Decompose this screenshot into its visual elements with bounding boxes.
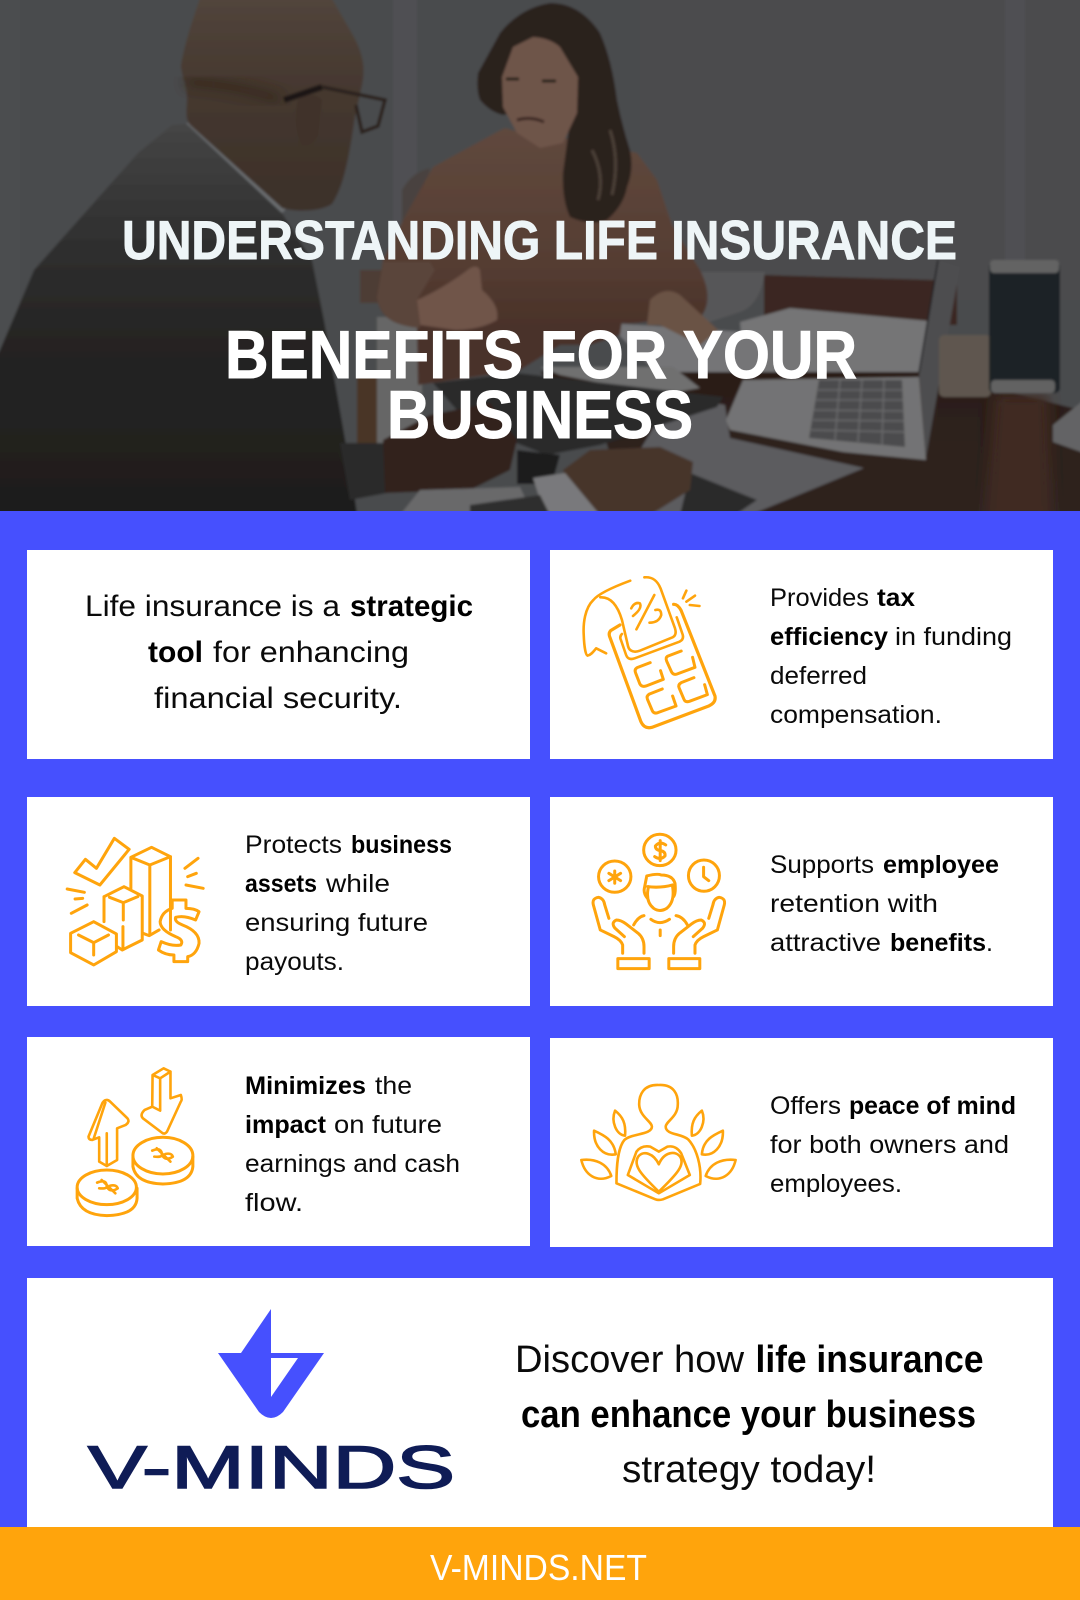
woman sweater xyxy=(377,128,708,327)
footer background xyxy=(0,1527,1080,1600)
dark notepad xyxy=(433,373,723,455)
title line: Understanding Life Insurance: UNDERSTANDING LIFE INSURANCE xyxy=(122,209,957,271)
text: employee retention: . xyxy=(986,929,993,957)
text: employee retention: retention with xyxy=(770,890,938,918)
title block xyxy=(122,209,957,453)
text: business assets xyxy=(245,831,452,976)
text: employee retention xyxy=(770,851,999,957)
text: minimizes impact: earnings and cash xyxy=(245,1150,460,1178)
panel: call to action xyxy=(27,1278,1053,1528)
text: employee retention: employee xyxy=(883,851,999,879)
chair behind woman xyxy=(402,170,430,220)
panel: tax efficiency xyxy=(550,550,1053,759)
card background xyxy=(27,550,530,759)
card background xyxy=(550,1038,1053,1247)
text: minimizes impact: impact xyxy=(245,1111,327,1139)
white folder under hand xyxy=(618,322,746,374)
man ear xyxy=(296,95,322,146)
laptop base xyxy=(726,377,926,460)
mug xyxy=(939,335,991,397)
desk papers xyxy=(540,367,700,395)
wall near desk xyxy=(377,317,422,450)
card background xyxy=(550,550,1053,759)
panel: strategic tool xyxy=(27,550,530,759)
glasses xyxy=(284,87,322,100)
text: business assets: while xyxy=(325,870,390,898)
panel: employee retention xyxy=(550,797,1053,1006)
man head xyxy=(181,0,364,211)
text: business assets: business xyxy=(351,831,452,859)
logo mark xyxy=(218,1309,324,1418)
man sleeve xyxy=(340,443,387,500)
text: minimizes impact: flow. xyxy=(245,1189,303,1217)
text: business assets: payouts. xyxy=(245,948,344,976)
logo: V-Minds xyxy=(88,1309,455,1501)
man collar xyxy=(186,122,290,213)
woman hands xyxy=(417,266,497,330)
text: business assets: Protects xyxy=(245,831,342,859)
logo wordmark: V-MINDS xyxy=(88,1434,455,1501)
notebook at edge xyxy=(1053,395,1080,455)
woman hair xyxy=(477,3,631,222)
white pillow xyxy=(702,273,765,321)
card background xyxy=(27,1037,530,1246)
footer url: V-MINDS.NET xyxy=(430,1547,647,1588)
text: strategic tool: tool xyxy=(148,636,203,669)
shirt cuff xyxy=(533,473,600,515)
table xyxy=(541,371,1080,511)
text: minimizes impact xyxy=(245,1072,460,1217)
text: tax efficiency: efficiency xyxy=(770,623,888,651)
folder xyxy=(640,395,864,515)
text: call to action: can enhance your business xyxy=(521,1394,976,1436)
text: strategic tool: financial security. xyxy=(154,682,402,715)
text: strategic tool: for enhancing xyxy=(213,636,409,669)
text: employee retention: Supports xyxy=(770,851,874,879)
text: tax efficiency: compensation. xyxy=(770,701,942,729)
card background xyxy=(27,797,530,1006)
subtitle line: Benefits for your: BENEFITS FOR YOUR xyxy=(225,317,857,393)
photo wall xyxy=(18,0,1080,511)
card background xyxy=(27,1278,1053,1528)
tumbler xyxy=(989,262,1060,393)
text: call to action: life insurance xyxy=(756,1339,984,1381)
text: minimizes impact: on future xyxy=(334,1111,442,1139)
text: business assets: ensuring future xyxy=(245,909,428,937)
text: tax efficiency: tax xyxy=(877,584,915,612)
text: tax efficiency: in funding xyxy=(895,623,1012,651)
text: strategic tool: strategic xyxy=(350,590,473,623)
panel: business assets xyxy=(27,797,530,1006)
text: tax efficiency: Provides xyxy=(770,584,869,612)
hero photo: two people at a desk xyxy=(0,0,1080,560)
subtitle line: Business: BUSINESS xyxy=(387,377,693,453)
icon: person in hands with coins xyxy=(593,834,725,969)
text: call to action: Discover how xyxy=(515,1339,745,1381)
icon: person with heart and leaves xyxy=(581,1085,736,1200)
text: call to action xyxy=(515,1339,984,1491)
keyboard xyxy=(809,380,905,447)
woman torso xyxy=(416,322,622,386)
woman face xyxy=(502,37,578,148)
panel: minimizes impact xyxy=(27,1037,530,1246)
text: employee retention: benefits xyxy=(890,929,986,957)
icon: calculator with receipt xyxy=(584,577,715,728)
footer bar xyxy=(0,1527,1080,1600)
paper stack xyxy=(740,308,945,372)
text: strategic tool xyxy=(85,590,473,715)
text: peace of mind: for both owners and xyxy=(770,1131,1009,1159)
panel: peace of mind xyxy=(550,1038,1053,1247)
text: strategic tool: Life insurance is a xyxy=(85,590,340,623)
text: peace of mind: employees. xyxy=(770,1170,902,1198)
text: call to action: strategy today! xyxy=(622,1449,876,1491)
text: employee retention: attractive xyxy=(770,929,881,957)
text: peace of mind xyxy=(770,1092,1016,1198)
chair back right xyxy=(764,275,957,325)
text: tax efficiency xyxy=(770,584,1012,729)
laptop screen xyxy=(918,280,958,454)
text: minimizes impact: Minimizes xyxy=(245,1072,366,1100)
text: tax efficiency: deferred xyxy=(770,662,867,690)
text: peace of mind: peace of mind xyxy=(849,1092,1016,1120)
card background xyxy=(550,797,1053,1006)
text: minimizes impact: the xyxy=(375,1072,412,1100)
icon: bars, check mark and dollar xyxy=(67,838,203,965)
icon: arrows and coins xyxy=(77,1068,193,1216)
man suit xyxy=(0,124,358,520)
man hands xyxy=(383,403,517,493)
text: business assets: assets xyxy=(245,870,317,898)
text: peace of mind: Offers xyxy=(770,1092,841,1120)
